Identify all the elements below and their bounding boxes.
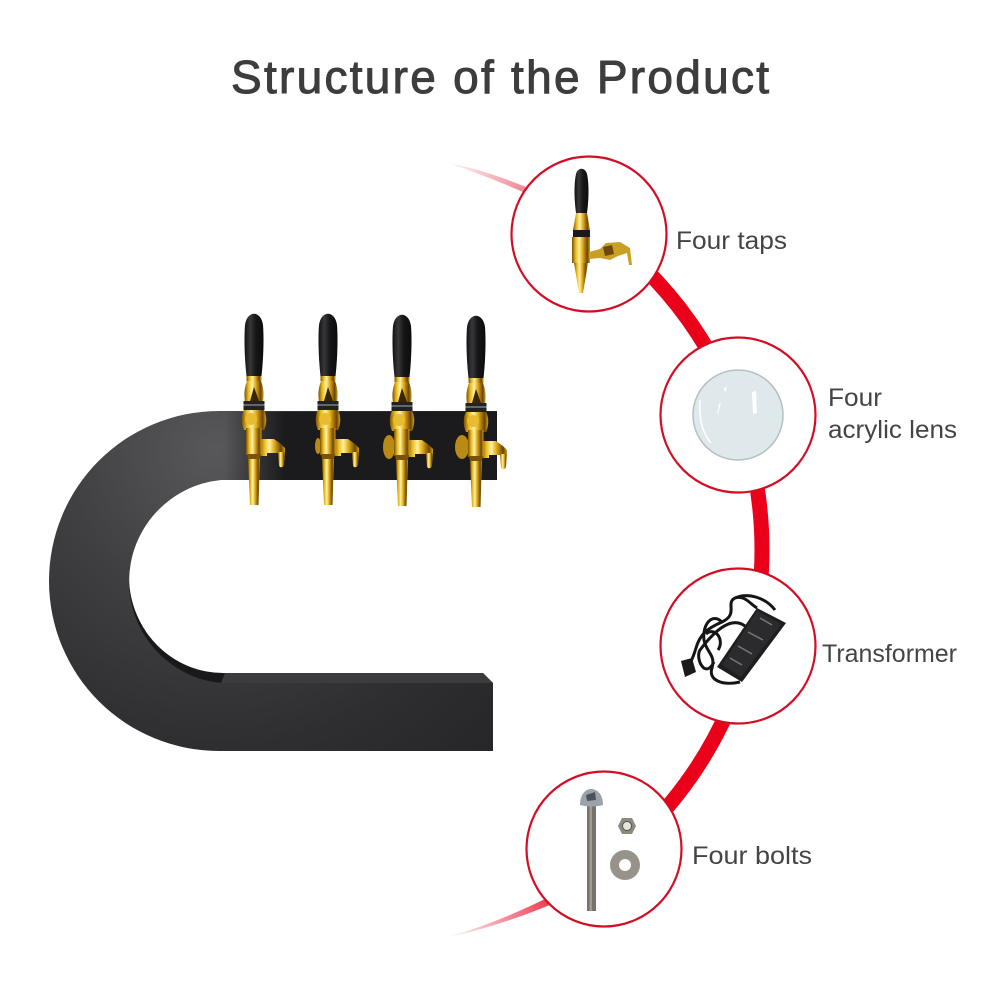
panel: U-shaped tap tower with four taps (49, 314, 507, 751)
panel: transformer (660, 568, 957, 724)
label: Transformer (822, 640, 957, 668)
circle (526, 772, 682, 926)
panel: four taps (512, 156, 787, 312)
icon: lens (693, 370, 783, 460)
icon: power adapter (681, 596, 786, 683)
label: acrylic lens (828, 416, 957, 444)
icon: washer (610, 850, 640, 880)
circle (660, 338, 816, 492)
panel: four acrylic lens (660, 338, 957, 492)
panel: four bolts (526, 772, 812, 926)
circle (660, 568, 816, 724)
mounting flanges (315, 435, 469, 459)
icon: nut (618, 818, 636, 834)
label: Four bolts (692, 842, 812, 870)
icon: single tap (572, 169, 632, 293)
red arc connector (445, 162, 762, 938)
label: Four taps (676, 227, 787, 255)
tap 1 (242, 314, 285, 505)
tap 2 (316, 314, 359, 505)
circle (512, 156, 666, 312)
title: Structure of the Product (231, 51, 769, 103)
tap 3 (390, 315, 433, 506)
tap 4 (464, 316, 507, 507)
U-shaped body (49, 411, 497, 751)
icon: bolt (580, 789, 603, 911)
label: Four (828, 384, 882, 412)
